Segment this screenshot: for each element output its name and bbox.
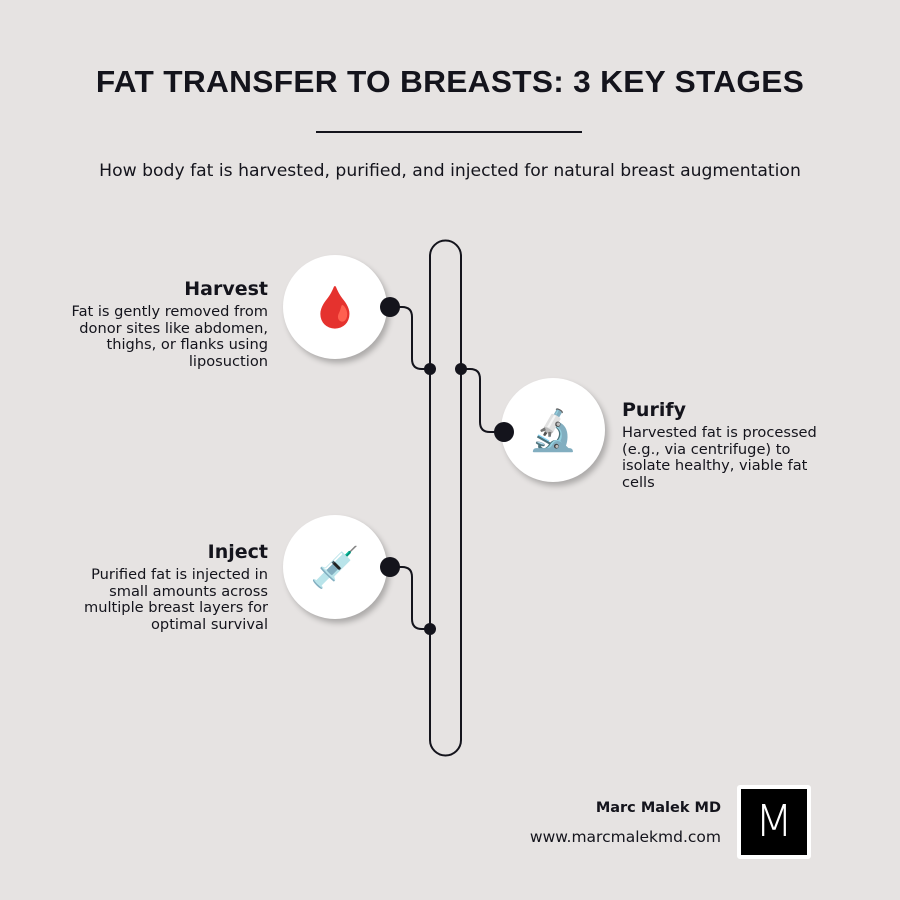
brand text: Marc Malek MD: [596, 800, 721, 816]
text: harvest: Fat is gently removed from: [72, 303, 268, 320]
icon: blood drop: 🩸: [310, 284, 360, 330]
brand text: www.marcmalekmd.com: [530, 828, 721, 846]
text: harvest: liposuction: [189, 352, 268, 370]
text: harvest: [72, 278, 268, 370]
logo: [737, 785, 811, 859]
subtitle: How body fat is harvested, purified, and injected for natural breast augmentation: [99, 161, 801, 181]
brand text: [530, 800, 721, 846]
text: purify: [622, 399, 817, 490]
title: FAT TRANSFER TO BREASTS: 3 KEY STAGES: [96, 64, 804, 99]
icon: blood drop: [283, 255, 387, 359]
text: purify: (e.g., via centrifuge) to: [622, 440, 790, 458]
text: purify: Harvested fat is processed: [622, 424, 817, 441]
text: purify: isolate healthy, viable fat: [622, 457, 807, 474]
icon: microscope: [501, 378, 605, 482]
icon: microscope: 🔬: [528, 408, 578, 454]
icon: syringe: 💉: [310, 544, 360, 590]
text: inject: Purified fat is injected in: [91, 566, 268, 583]
text: harvest: thighs, or flanks using: [106, 336, 268, 353]
text: inject: optimal survival: [151, 616, 268, 632]
text: inject: [84, 541, 268, 632]
text: harvest: donor sites like abdomen,: [79, 320, 268, 336]
text: inject: small amounts across: [109, 582, 268, 600]
text: inject: multiple breast layers for: [84, 599, 268, 616]
text: purify: Purify: [622, 399, 686, 421]
logo: M: [755, 796, 793, 847]
icon: syringe: [283, 515, 387, 619]
text: inject: Inject: [208, 541, 268, 563]
text: purify: cells: [622, 474, 655, 490]
text: harvest: Harvest: [184, 278, 268, 300]
